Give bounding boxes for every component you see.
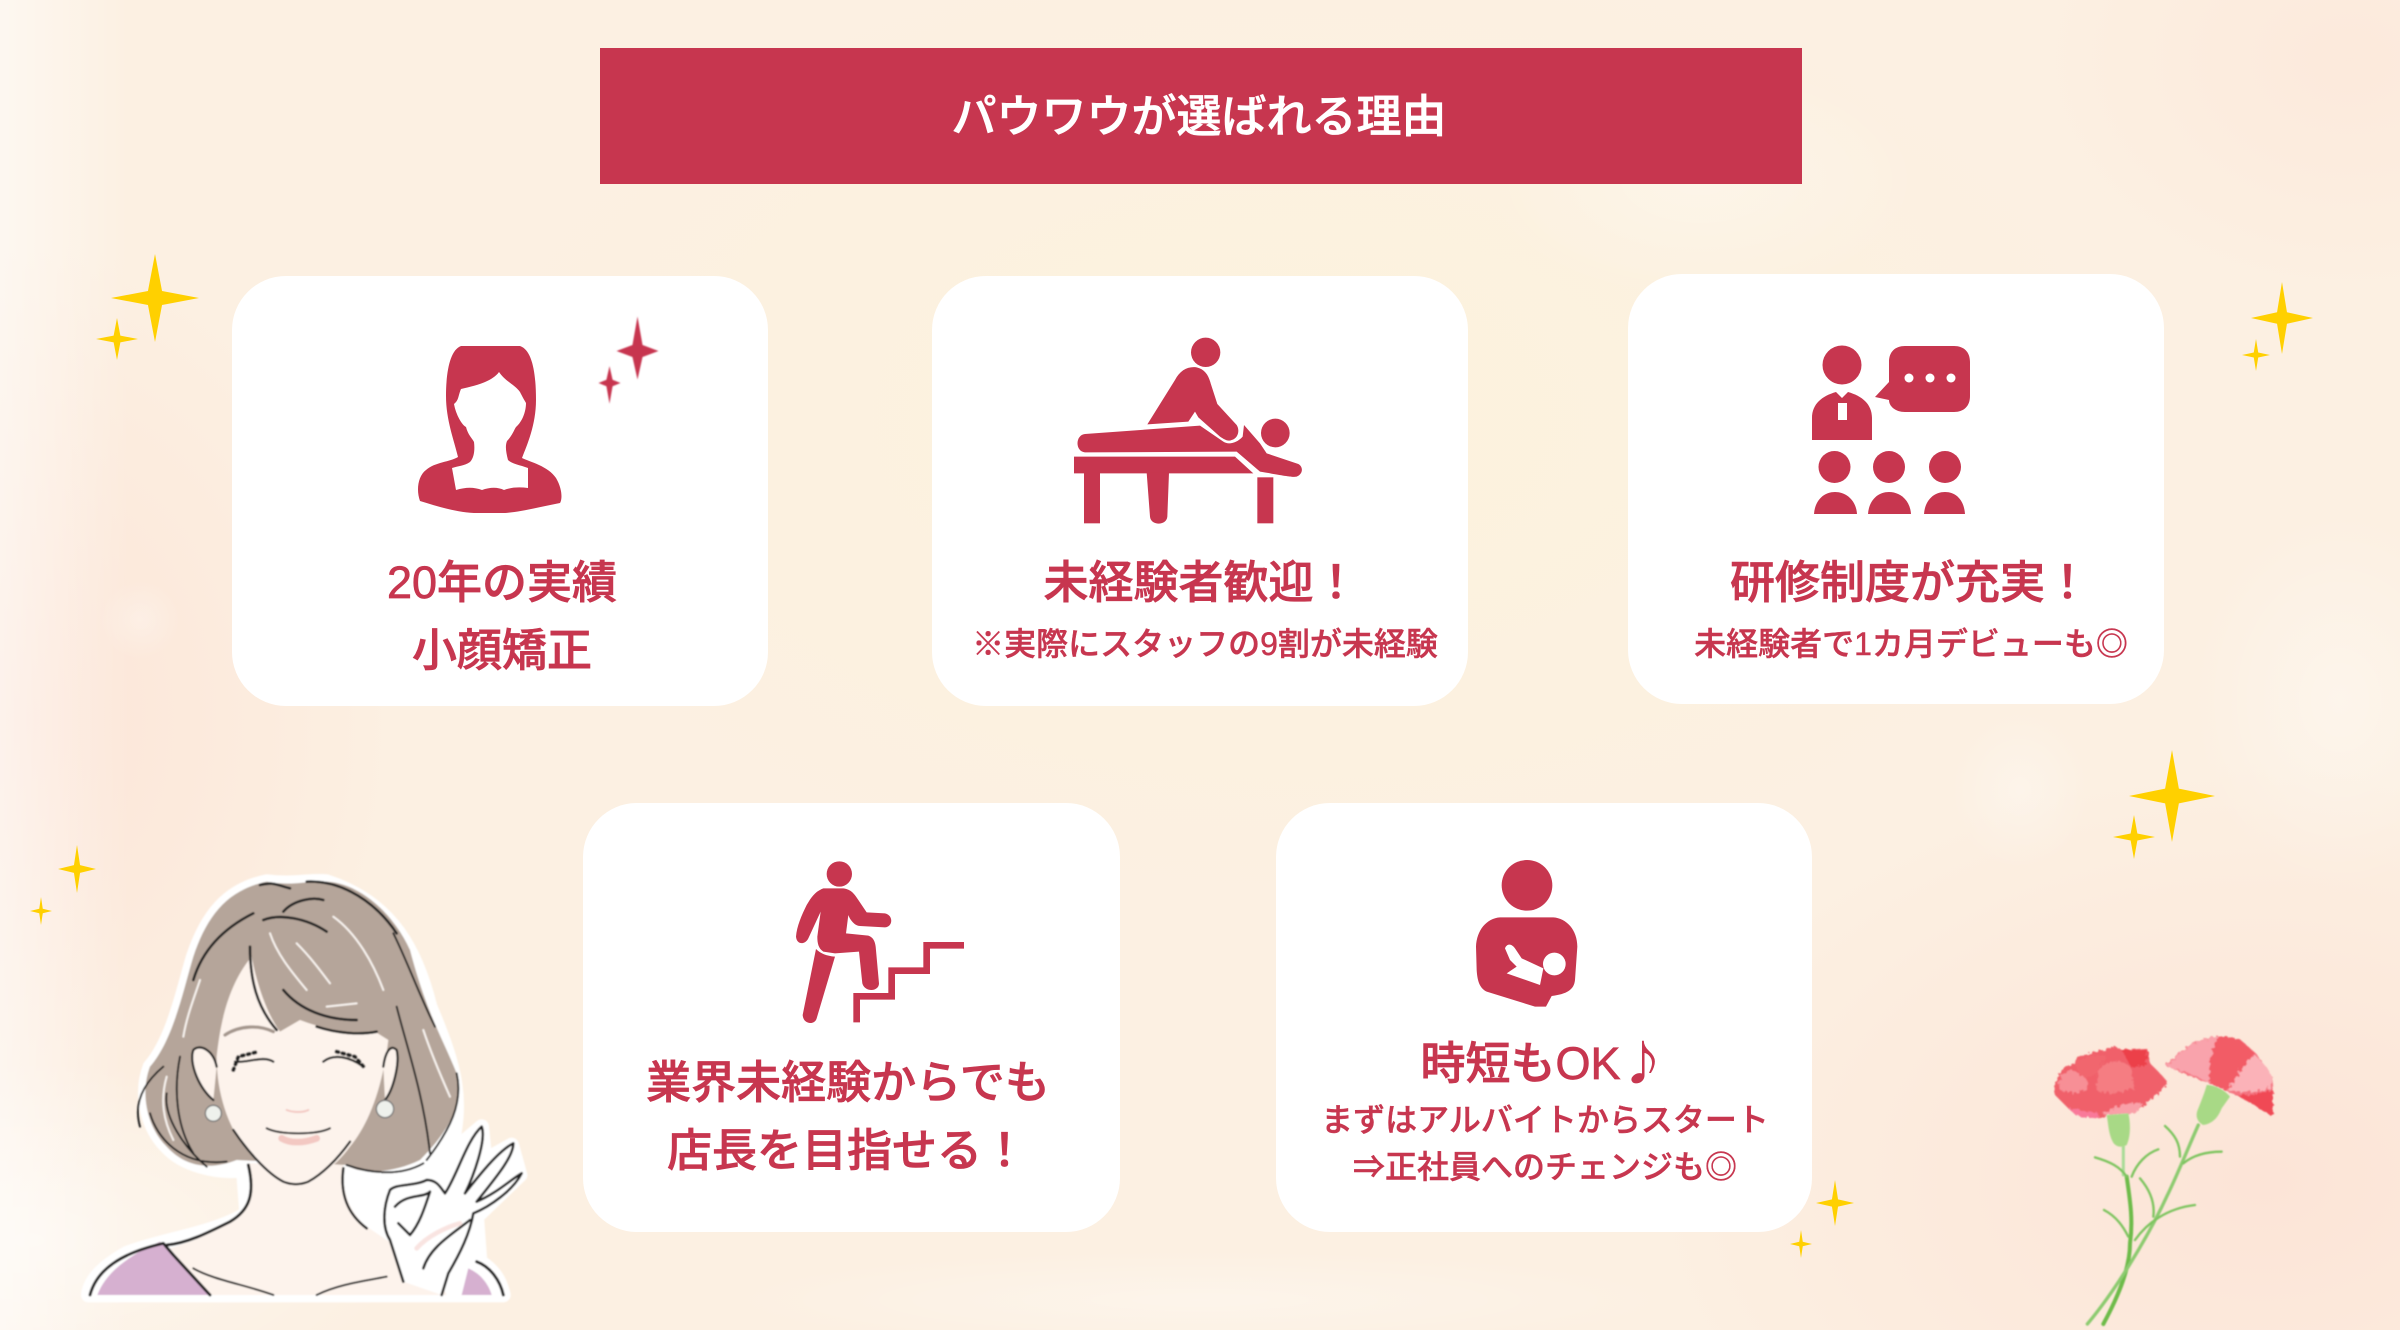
sepals: [2107, 1085, 2230, 1147]
subtext: ※実際にスタッフの9割が未経験: [972, 626, 1438, 662]
panel: store manager path: [583, 803, 1120, 1232]
earrings: [205, 1105, 221, 1121]
heading: 未経験者歓迎！: [1043, 557, 1359, 608]
illustration: red carnations: [2055, 1036, 2273, 1324]
title banner: [600, 48, 1802, 184]
heading line 2: 小顔矯正: [412, 625, 592, 676]
sweater: [97, 1242, 210, 1295]
neck lines: [167, 1165, 251, 1245]
panel: training system: [1628, 274, 2164, 704]
icon: woman silhouette: [418, 346, 561, 513]
OK hand: [384, 1127, 522, 1295]
neck and chest: [170, 1163, 447, 1295]
face lines: [233, 1130, 350, 1184]
subtext: 未経験者で1カ月デビューも◎: [1694, 626, 2128, 662]
heading: 業界未経験からでも: [646, 1057, 1050, 1108]
face: [217, 957, 388, 1183]
title banner: パウワウが選ばれる理由: [951, 91, 1447, 142]
hair lines: [260, 882, 397, 933]
blooms: [2055, 1036, 2273, 1118]
subtext line 1: まずはアルバイトからスタート: [1321, 1102, 1769, 1138]
icon: person climbing stairs: [796, 861, 964, 1023]
icon: red sparkles: [598, 316, 658, 404]
ears: [192, 1047, 217, 1100]
illustration: smiling woman with OK hand: [88, 881, 522, 1295]
white halo: [88, 881, 520, 1295]
gold sparkles: [30, 254, 2313, 1258]
heading: 研修制度が充実！: [1730, 557, 2090, 608]
heading line 2: 店長を目指せる！: [667, 1125, 1027, 1176]
stems: [2087, 1125, 2222, 1324]
panel: inexperienced welcome: [932, 276, 1468, 706]
heading: 時短もOK♪: [1420, 1027, 1666, 1092]
icon: massage table: [1074, 338, 1302, 524]
subtext line 2: ⇒正社員へのチェンジも◎: [1353, 1149, 1737, 1185]
panel: short hours OK: [1276, 803, 1812, 1232]
heading: 20年の実績: [387, 557, 617, 608]
icon: parent holding baby: [1476, 860, 1577, 1007]
hair: [145, 881, 458, 1171]
icon: teacher and students: [1812, 346, 1970, 514]
panel: 20 years of results: [232, 276, 768, 706]
